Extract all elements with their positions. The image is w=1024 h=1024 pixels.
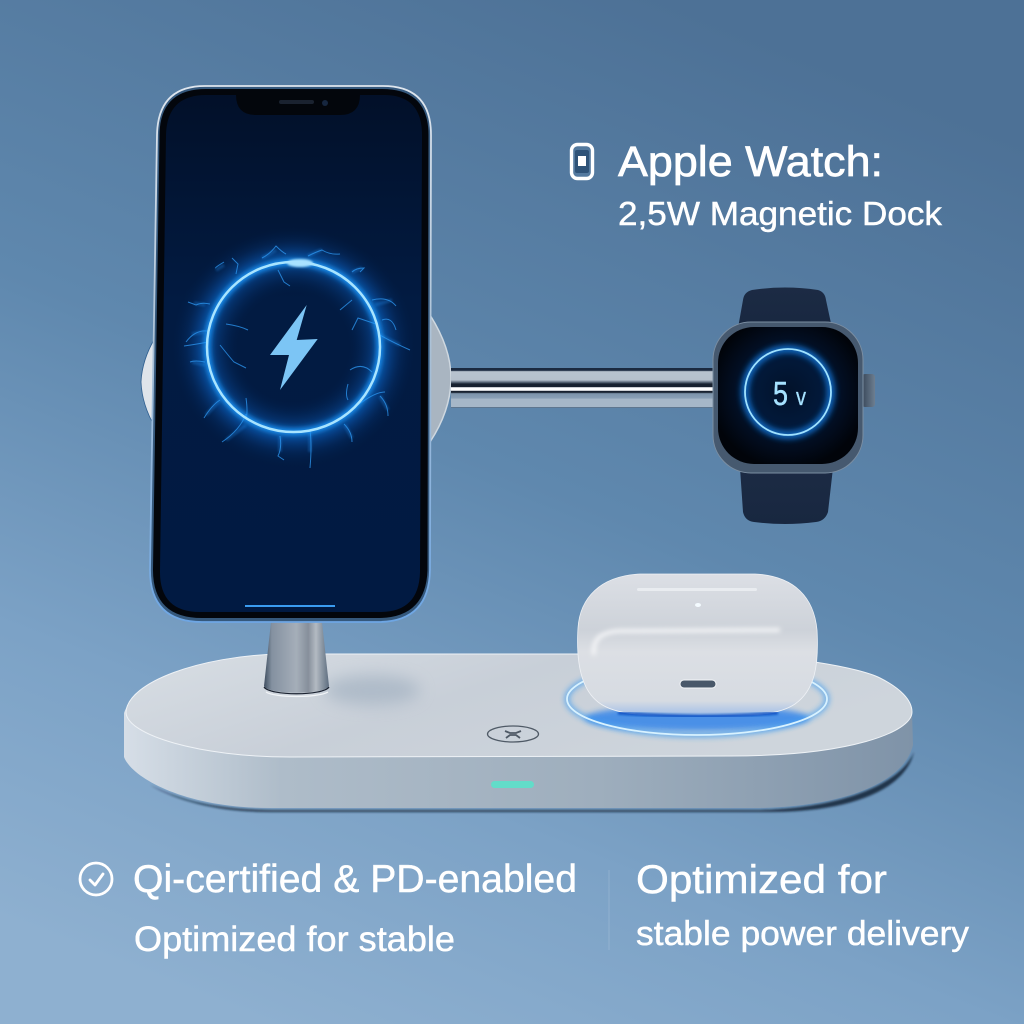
phone <box>150 86 431 622</box>
watch band bottom <box>740 468 833 524</box>
subheading: 2,5W Magnetic Dock <box>618 195 943 232</box>
earbuds charging ring <box>567 663 827 735</box>
watch voltage: 5 <box>773 375 788 412</box>
heading: Optimized for <box>636 858 887 902</box>
earbuds shadow line <box>618 713 778 716</box>
charging arm <box>451 368 714 408</box>
callout: apple watch <box>572 138 943 232</box>
status LED <box>491 781 534 788</box>
blurred sparks <box>192 250 400 452</box>
watch band top <box>738 288 832 328</box>
electric sparks <box>184 246 410 468</box>
button logo <box>488 726 538 742</box>
magnetic disc right <box>430 315 451 442</box>
watch voltage unit: v <box>796 384 806 411</box>
lightning bolt <box>270 305 318 390</box>
magnetic disc left <box>141 338 155 427</box>
earbuds lid fold highlight <box>594 630 780 655</box>
watch ring <box>745 349 831 435</box>
heading: Apple Watch: <box>618 138 883 186</box>
phone screen <box>160 95 422 612</box>
watch case <box>713 322 863 473</box>
charging stand base <box>124 654 913 808</box>
base shadow <box>150 752 914 812</box>
stand stem <box>264 622 329 696</box>
notch details <box>279 100 328 106</box>
earbuds case <box>578 574 817 716</box>
body text: Optimized for stable <box>134 920 455 959</box>
watch crown <box>862 374 875 407</box>
charging ring on phone <box>172 227 416 468</box>
icon: watch <box>572 144 592 178</box>
watch <box>713 288 875 524</box>
home bar <box>245 605 335 607</box>
earbuds port <box>680 680 716 688</box>
icon: check circle <box>80 863 112 895</box>
body text: stable power delivery <box>636 915 969 953</box>
feature: qi certified <box>80 858 577 959</box>
feature: stable power <box>636 858 969 953</box>
watch screen <box>718 327 858 464</box>
heading: Qi-certified & PD-enabled <box>133 858 577 901</box>
